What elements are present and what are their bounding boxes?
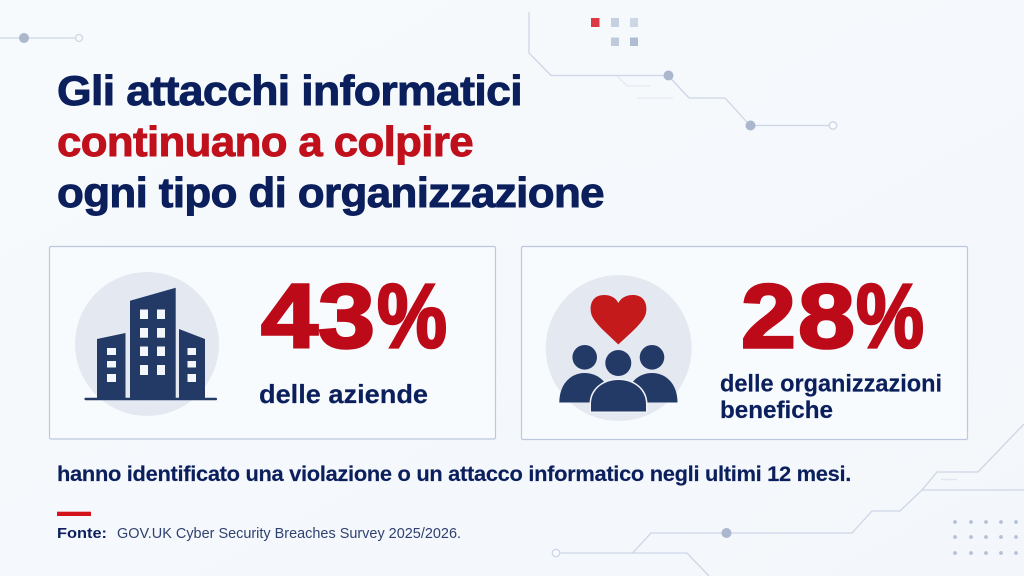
stat: 43%: % <box>377 266 447 368</box>
panel: organizzazioni benefiche <box>522 246 968 440</box>
circuit decoration: top left <box>0 33 82 43</box>
stat: 43%: 3 <box>318 266 375 368</box>
stat: 43%: 4 <box>261 266 318 368</box>
accent bar <box>57 512 91 516</box>
icon: buildings <box>75 272 219 416</box>
stat: 28%: % <box>856 266 924 368</box>
panel: aziende <box>50 246 496 439</box>
title: continuano a colpire <box>57 118 473 165</box>
stat: 28%: 2 <box>741 266 796 368</box>
panel frame <box>50 246 496 439</box>
source: Fonte: <box>57 525 107 542</box>
title <box>57 67 604 216</box>
title: Gli attacchi informatici <box>57 67 522 114</box>
circuit decoration: top right <box>529 12 837 130</box>
title: ogni tipo di organizzazione <box>57 169 604 216</box>
panel frame <box>522 246 968 440</box>
stat: 28%: 8 <box>798 266 855 368</box>
dot grid <box>953 520 1018 555</box>
icon: heart and people <box>546 275 692 421</box>
circuit decoration: bottom right <box>552 424 1024 576</box>
label: delle organizzazioni benefiche: delle organizzazioni <box>720 370 942 398</box>
decorative squares <box>591 18 638 46</box>
source: GOV.UK Cyber Security Breaches Survey 2025/2026. <box>117 525 461 542</box>
label: delle aziende: delle aziende <box>259 379 428 409</box>
label: delle organizzazioni benefiche: benefiche <box>720 397 833 424</box>
summary statement: hanno identificato una violazione o un attacco informatico negli ultimi 12 mesi. <box>57 463 851 486</box>
label: delle organizzazioni benefiche <box>720 370 942 424</box>
